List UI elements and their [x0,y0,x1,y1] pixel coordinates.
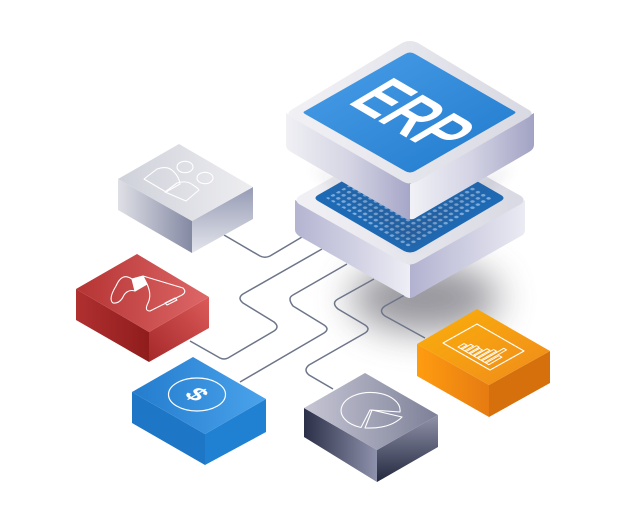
lower ERP slab [295,136,525,298]
chip panel [316,144,504,252]
ERP label: ERP [334,69,491,162]
icon: bar chart [443,324,524,370]
module: users (gray) [118,144,253,253]
module: reports (orange) [417,309,550,417]
module: marketing (red) [76,254,209,362]
icon: dollar coin: $ [178,384,215,405]
icon: megaphone [111,276,185,311]
ground shadow under ERP stack [351,264,499,332]
top ERP slab [286,41,534,219]
ERP blue screen [304,52,516,172]
icon: people [144,161,213,201]
shadow from top slab [310,165,515,245]
module: analytics (dark gray) [304,373,438,482]
icon: pie chart [341,392,402,428]
module: finance (blue) [132,357,266,465]
connector lines [190,235,425,389]
